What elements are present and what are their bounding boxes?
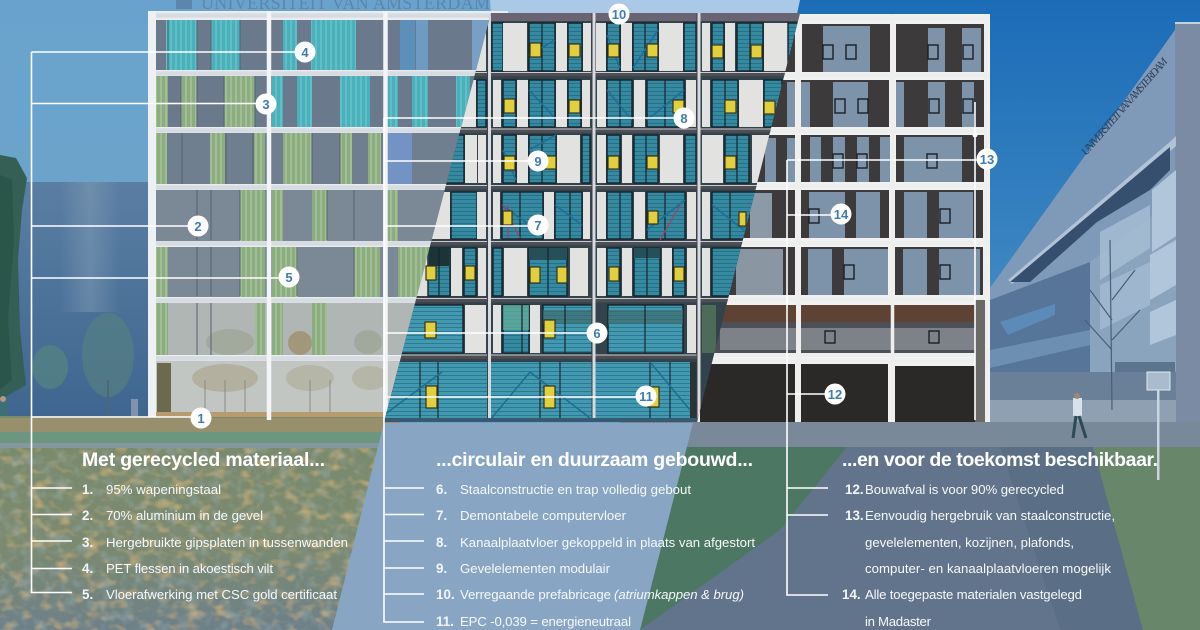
row 5 bbox=[410, 248, 742, 296]
text block: recycled materials bbox=[82, 449, 348, 602]
background building right bbox=[990, 22, 1200, 422]
ground: meadow left bbox=[0, 416, 400, 630]
sky band above section bbox=[490, 0, 800, 14]
list column 2: 9. bbox=[436, 561, 447, 576]
list column 1: Hergebruikte gipsplaten in tussenwanden bbox=[106, 535, 348, 550]
number badges bbox=[188, 4, 998, 428]
badge 3 bbox=[256, 94, 276, 114]
badge 5 bbox=[278, 266, 300, 288]
list column 2: EPC -0,039 = energieneutraal bbox=[460, 614, 631, 629]
trees left bbox=[0, 155, 134, 416]
row 3 bbox=[438, 135, 774, 183]
badge 10 bbox=[608, 4, 630, 24]
floor 4 bbox=[156, 190, 506, 241]
list column 2: 8. bbox=[436, 535, 447, 550]
plinth floor 7 bbox=[700, 364, 981, 422]
badge 14 bbox=[830, 204, 852, 224]
badge 12 bbox=[824, 384, 846, 404]
badge 14: 14 bbox=[834, 207, 849, 222]
floor 3 bbox=[156, 133, 506, 184]
list column 1 bbox=[82, 482, 348, 602]
list column 2: Verregaande prefabricage bbox=[460, 587, 611, 602]
list column 3: computer- en kanaalplaatvloeren mogelijk bbox=[865, 561, 1111, 576]
badge 5: 5 bbox=[285, 270, 293, 285]
list column 1: PET flessen in akoestisch vilt bbox=[106, 561, 273, 576]
list column 1: 95% wapeningstaal bbox=[106, 482, 221, 497]
list column 2: 7. bbox=[436, 508, 447, 523]
badge 2: 2 bbox=[194, 219, 202, 234]
badge 13 bbox=[976, 148, 998, 170]
list column 1: 3. bbox=[82, 535, 93, 550]
framed window openings bbox=[809, 45, 973, 279]
street sign bbox=[1147, 372, 1170, 480]
list column 3 bbox=[842, 482, 1115, 629]
BIM floor slabs bbox=[380, 74, 800, 357]
floor 1 bbox=[156, 20, 506, 70]
callout lines column 2 bbox=[384, 118, 680, 622]
badge 7 bbox=[528, 214, 548, 236]
badge 4: 4 bbox=[301, 45, 309, 60]
row 6 bbox=[395, 305, 716, 353]
floor 2 bbox=[156, 76, 506, 127]
person walking bbox=[1073, 393, 1086, 438]
badge 11: 11 bbox=[639, 389, 653, 404]
list column 2: 6. bbox=[436, 482, 447, 497]
list column 3: 14. bbox=[842, 587, 861, 602]
badge 10: 10 bbox=[612, 7, 626, 22]
badge 2 bbox=[188, 216, 208, 236]
badge 11 bbox=[636, 386, 656, 406]
list column 2: (atriumkappen & brug) bbox=[614, 587, 744, 602]
badge 9: 9 bbox=[534, 154, 542, 169]
badge 7: 7 bbox=[534, 218, 542, 233]
BIM columns bbox=[490, 13, 699, 422]
badge 9 bbox=[528, 150, 548, 172]
background: left sky bbox=[0, 0, 500, 420]
row 7 bbox=[384, 362, 699, 422]
badge 8: 8 bbox=[680, 111, 688, 126]
badge 8 bbox=[674, 108, 694, 128]
background: neighbouring building left bbox=[0, 182, 150, 420]
facade white grid bbox=[148, 16, 510, 358]
people left bbox=[0, 396, 138, 420]
list column 3: gevelelementen, kozijnen, plafonds, bbox=[865, 535, 1074, 550]
floor 7 bbox=[156, 361, 506, 417]
list column 1: 4. bbox=[82, 561, 93, 576]
badge 3: 3 bbox=[262, 97, 270, 112]
list column 1: 5. bbox=[82, 587, 93, 602]
callout lines column 1 bbox=[32, 52, 300, 592]
panel: realised building facade bbox=[690, 14, 990, 422]
facade window mullions bbox=[168, 20, 354, 355]
row 1 bbox=[468, 23, 798, 71]
text block: circular and sustainable bbox=[436, 449, 755, 629]
list column 3: Eenvoudig hergebruik van staalconstructie, bbox=[865, 508, 1115, 523]
list column 1: Vloerafwerking met CSC gold certificaat bbox=[106, 587, 337, 602]
window mullions bbox=[439, 23, 750, 353]
list column 2: Kanaalplaatvloer gekoppeld in plaats van afgestort bbox=[460, 535, 755, 550]
badge 6 bbox=[586, 322, 608, 344]
text block: available for the future bbox=[842, 449, 1158, 629]
list column 1: 2. bbox=[82, 508, 93, 523]
list column 3: 12. bbox=[845, 482, 864, 497]
floors 1-5 dark cladding bbox=[700, 24, 984, 295]
floor 6 bbox=[156, 303, 506, 355]
panel: design render facade bbox=[148, 11, 510, 422]
glazing bbox=[736, 26, 981, 295]
badge 1 bbox=[190, 408, 212, 428]
heading column 1: Met gerecycled materiaal... bbox=[82, 449, 325, 471]
badge 4 bbox=[294, 42, 316, 62]
list column 2: 10. bbox=[436, 587, 455, 602]
badge 6: 6 bbox=[593, 326, 601, 341]
heading column 2: ...circulair en duurzaam gebouwd... bbox=[436, 449, 753, 471]
floor 5 bbox=[156, 247, 506, 297]
background: right sky bbox=[760, 0, 1200, 430]
callout lines column 3 bbox=[787, 102, 984, 595]
row 4 bbox=[425, 192, 760, 239]
list column 3: in Madaster bbox=[865, 614, 932, 629]
heading column 3: ...en voor de toekomst beschikbaar. bbox=[842, 449, 1158, 471]
diagonal steel bracing bbox=[502, 30, 750, 235]
list column 1: 70% aluminium in de gevel bbox=[106, 508, 263, 523]
badge 1: 1 bbox=[197, 411, 205, 426]
yellow components bbox=[425, 43, 775, 408]
connection dot bbox=[972, 132, 978, 138]
building lettering: UNIVERSITEIT VAN AMSTERDAM bbox=[1079, 55, 1171, 158]
ground: path and grass right bbox=[620, 420, 1200, 630]
row 2 bbox=[450, 80, 782, 127]
realised white grid bbox=[690, 18, 990, 361]
badge 13: 13 bbox=[980, 152, 994, 167]
list column 2: 11. bbox=[436, 614, 454, 629]
open floor 6 bbox=[700, 305, 985, 353]
list column 3: 13. bbox=[845, 508, 864, 523]
panel: BIM steel section model bbox=[380, 13, 810, 423]
list column 2: Staalconstructie en trap volledig gebout bbox=[460, 482, 691, 497]
list column 2 bbox=[436, 482, 755, 629]
university logo mark bbox=[176, 0, 192, 9]
list column 3: Alle toegepaste materialen vastgelegd bbox=[865, 587, 1082, 602]
list column 3: Bouwafval is voor 90% gerecycled bbox=[865, 482, 1064, 497]
list column 2: Gevelelementen modulair bbox=[460, 561, 611, 576]
panel: translucent band below section bbox=[332, 423, 693, 630]
list column 2: Demontabele computervloer bbox=[460, 508, 627, 523]
list column 1: 1. bbox=[82, 482, 93, 497]
badge 12: 12 bbox=[828, 387, 842, 402]
